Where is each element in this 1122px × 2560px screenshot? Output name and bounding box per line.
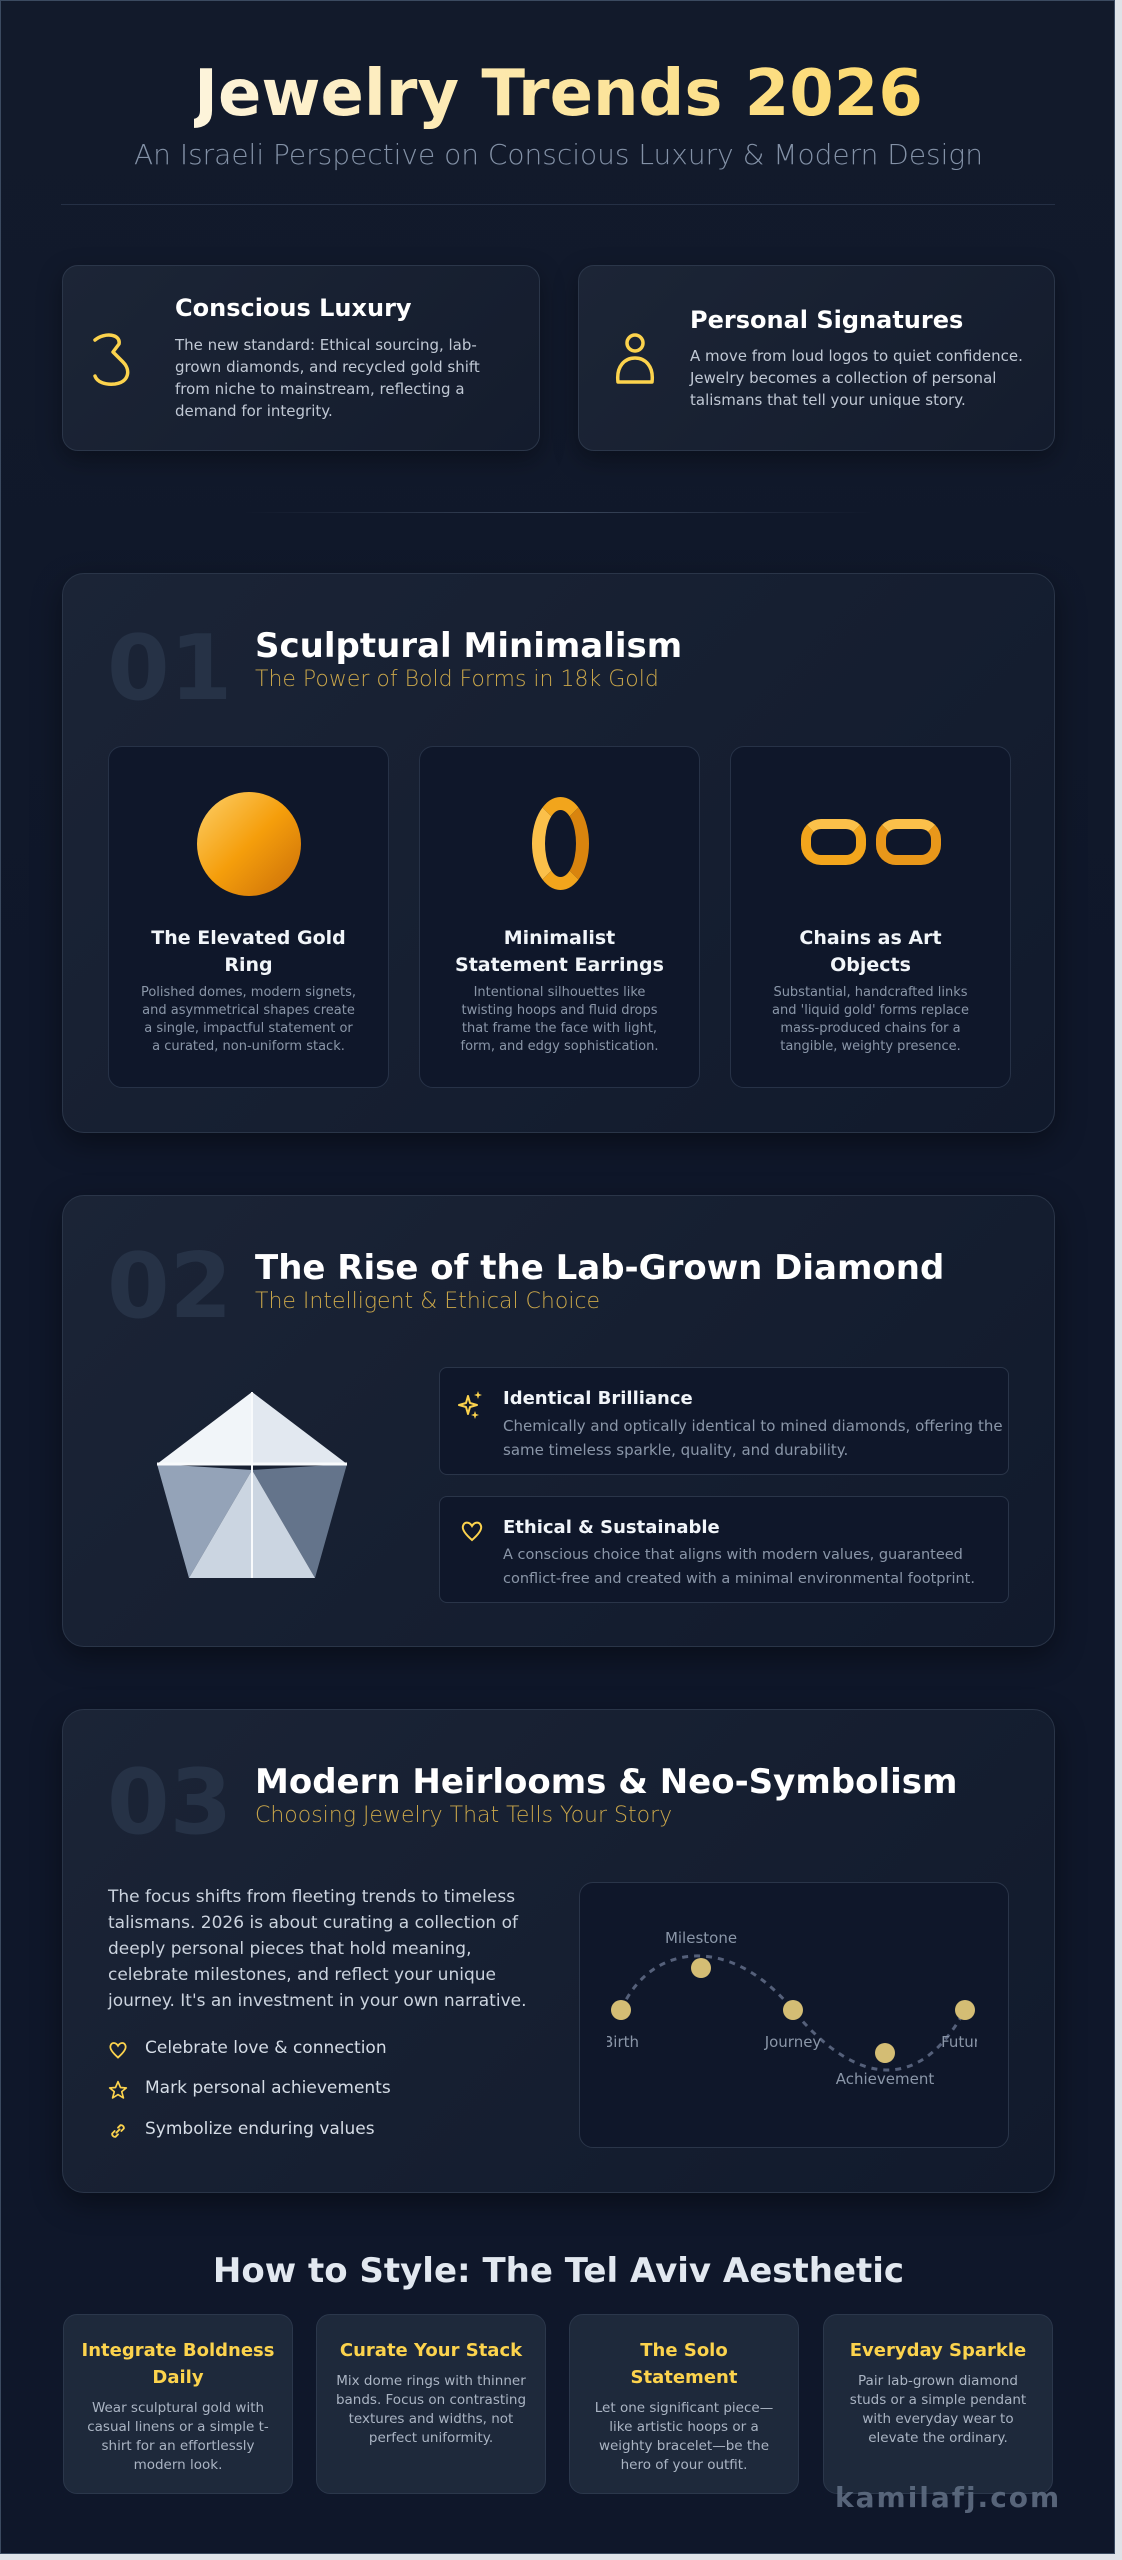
- tip: boldness: Integrate Boldness Daily: [82, 2340, 274, 2388]
- chart: life journey: Milestone: [665, 1929, 737, 1947]
- icon: hoop: [532, 797, 589, 890]
- icon: heart: [462, 1522, 482, 1542]
- card: personal signatures: [578, 265, 1055, 451]
- icon: sparkles: [458, 1391, 482, 1419]
- subheading: The Power of Bold Forms in 18k Gold: [255, 667, 659, 692]
- subcard: ring: The Elevated Gold Ring: [151, 927, 346, 976]
- tip: sparkle: Everyday Sparkle: [850, 2340, 1026, 2361]
- watermark: kamilafj.com: [835, 2481, 1061, 2514]
- subcard: ring: Polished domes, modern signets, and asymmetrical shapes create a single, impactful statement or a curated, non-uniform stack.: [141, 985, 356, 1054]
- item: values: Symbolize enduring values: [145, 2119, 375, 2139]
- subheading: The Intelligent & Ethical Choice: [255, 1289, 600, 1314]
- icon: chain links: [801, 819, 866, 865]
- subheading: Choosing Jewelry That Tells Your Story: [255, 1803, 672, 1828]
- tip: solo: The Solo Statement: [631, 2340, 737, 2388]
- icon: diamond: [157, 1392, 347, 1578]
- text: A move from loud logos to quiet confidence. Jewelry becomes a collection of personal talismans that tell your unique story.: [690, 347, 1023, 409]
- tip: stack: Mix dome rings with thinner bands. Focus on contrasting textures and widths, not perfect uniformity.: [336, 2373, 526, 2446]
- icon: gold dome: [197, 792, 301, 896]
- subcard: chains: [730, 746, 1011, 1088]
- heading: Conscious Luxury: [175, 294, 412, 322]
- tip: sparkle: [823, 2314, 1053, 2494]
- icon: recycle loop: [93, 333, 130, 386]
- heading: how to style: How to Style: The Tel Aviv Aesthetic: [213, 2251, 904, 2291]
- heading: The Rise of the Lab-Grown Diamond: [255, 1248, 944, 1288]
- heading: Personal Signatures: [690, 306, 963, 334]
- tip: sparkle: Pair lab-grown diamond studs or a simple pendant with everyday wear to elevate the ordinary.: [850, 2373, 1026, 2446]
- feature: ethical: [439, 1496, 1009, 1603]
- subtitle: An Israeli Perspective on Conscious Luxury & Modern Design: [134, 138, 983, 171]
- feature: brilliance: Identical Brilliance: [503, 1388, 693, 1409]
- feature: ethical: Ethical & Sustainable: [503, 1517, 720, 1538]
- tip: boldness: Wear sculptural gold with casual linens or a simple t-shirt for an effortlessly modern look.: [87, 2400, 269, 2473]
- item: achievements: Mark personal achievements: [145, 2078, 391, 2098]
- heading: Sculptural Minimalism: [255, 626, 682, 666]
- text: The new standard: Ethical sourcing, lab-grown diamonds, and recycled gold shift from niche to mainstream, reflecting a demand for integrity.: [175, 336, 480, 420]
- list: [108, 2038, 391, 2139]
- panel: section 01: [62, 573, 1055, 1133]
- chart: life journey: [579, 1882, 1009, 2148]
- subcard: chains: Chains as Art Objects: [799, 927, 942, 976]
- chart: life journey: Journey: [764, 2033, 821, 2051]
- number 01: 01: [107, 616, 232, 721]
- feature: brilliance: Chemically and optically identical to mined diamonds, offering the same timeless sparkle, quality, and durability.: [503, 1417, 1003, 1459]
- tip: stack: [316, 2314, 546, 2494]
- subcard: earrings: Minimalist Statement Earrings: [455, 927, 664, 976]
- icon: person: [616, 333, 654, 384]
- tip: solo: Let one significant piece—like artistic hoops or a weighty bracelet—be the hero of your outfit.: [595, 2400, 773, 2473]
- panel: section 03: [62, 1709, 1055, 2193]
- card: conscious luxury: [62, 265, 540, 451]
- number 03: 03: [107, 1750, 232, 1855]
- tip: stack: Curate Your Stack: [340, 2340, 522, 2361]
- heading: Modern Heirlooms & Neo-Symbolism: [255, 1762, 957, 1802]
- feature: ethical: A conscious choice that aligns with modern values, guaranteed conflict-free and created with a minimal environmental footprint.: [503, 1547, 975, 1587]
- chart: life journey: Achievement: [836, 2070, 934, 2088]
- panel: section 02: [62, 1195, 1055, 1647]
- subcard: earrings: [419, 746, 700, 1088]
- feature: brilliance: [439, 1367, 1009, 1475]
- title: Jewelry Trends 2026: [194, 57, 923, 131]
- subcard: earrings: Intentional silhouettes like twisting hoops and fluid drops that frame the face with light, form, and edgy sophistication.: [461, 985, 658, 1054]
- tip: boldness: [63, 2314, 293, 2494]
- paragraph: The focus shifts from fleeting trends to timeless talismans. 2026 is about curating a collection of deeply personal pieces that hold meaning, celebrate milestones, and reflect your unique journey. It's an investment in your own narrative.: [108, 1887, 526, 2011]
- item: love: Celebrate love & connection: [145, 2038, 387, 2058]
- subcard: chains: Substantial, handcrafted links and 'liquid gold' forms replace mass-produced chains for a tangible, weighty presence.: [772, 985, 969, 1054]
- subcard: ring: [108, 746, 389, 1088]
- number 02: 02: [107, 1234, 232, 1339]
- tip: solo: [569, 2314, 799, 2494]
